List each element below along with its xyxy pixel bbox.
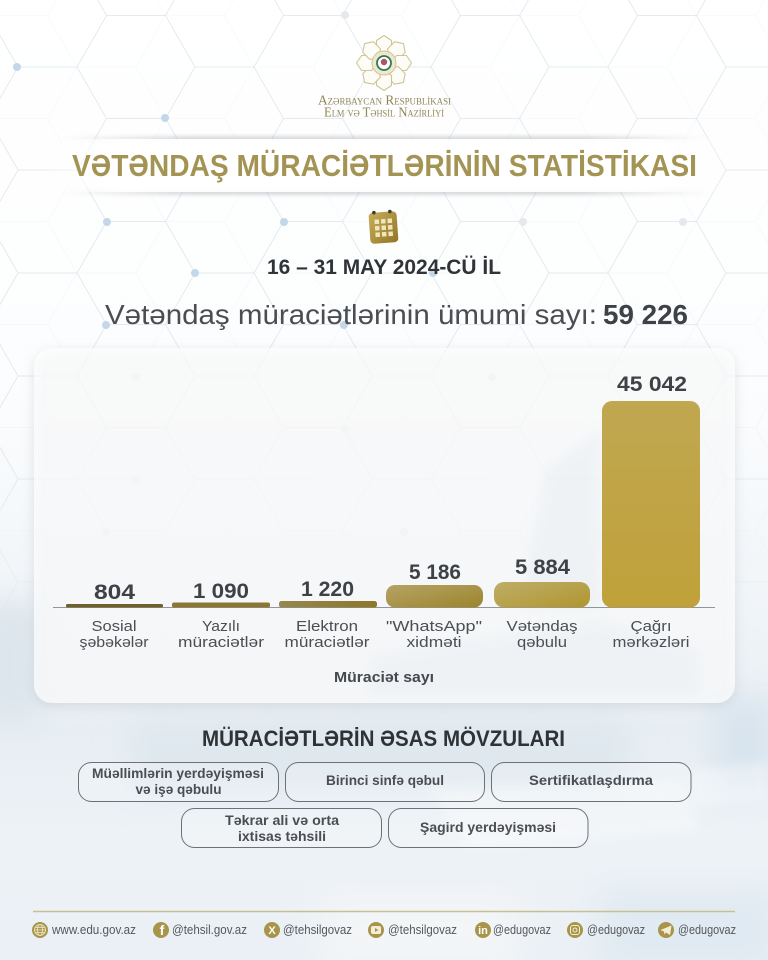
icon: X: @tehsilgovaz	[283, 923, 352, 937]
axis caption: Müraciət sayı	[334, 669, 434, 686]
pill: repeat higher education: ixtisas təhsili	[238, 828, 326, 844]
bar: WhatsApp xidməti: xidməti	[406, 634, 462, 651]
icon: linkedin	[475, 922, 551, 938]
title: VƏTƏNDAŞ MÜRACİƏTLƏRİNİN STATİSTİKASI	[72, 148, 697, 183]
icon: calendar	[368, 209, 399, 244]
bar: WhatsApp xidməti	[386, 561, 483, 651]
title band	[40, 137, 730, 194]
total appeals: 59 226	[603, 299, 688, 330]
axis	[53, 606, 715, 608]
logo: ministry emblem and name: Elm və Təhsil Nazirliyi	[324, 104, 444, 120]
bar: Yazılı müraciətlər: 1 090	[193, 580, 249, 603]
bar: Yazılı müraciətlər	[172, 580, 270, 651]
bar: WhatsApp xidməti: "WhatsApp"	[386, 618, 482, 635]
total appeals: Vətəndaş müraciətlərinin ümumi sayı:	[105, 299, 597, 330]
pill: first grade admission	[286, 762, 484, 802]
bar: Vətəndaş qəbulu: Vətəndaş	[506, 618, 578, 635]
pill: teacher transfer	[78, 762, 278, 802]
topic pills	[78, 762, 691, 848]
icon: instagram	[567, 922, 645, 938]
icon: X: X	[268, 925, 276, 937]
bar: Çağrı mərkəzləri	[602, 373, 700, 651]
bar: Sosial şəbəkələr: 804	[94, 581, 135, 604]
panel: bar chart	[34, 348, 735, 703]
bar: WhatsApp xidməti: 5 186	[409, 561, 461, 584]
bar: Vətəndaş qəbulu	[494, 556, 590, 651]
pill: student transfer	[388, 808, 588, 848]
icon: eight-petal emblem	[356, 36, 412, 90]
bar: Elektron müraciətlər: Elektron	[296, 618, 358, 635]
icon: website	[32, 922, 136, 938]
pill: repeat higher education: Təkrar ali və orta	[225, 812, 339, 828]
bar: Çağrı mərkəzləri: mərkəzləri	[612, 634, 690, 651]
bar: Elektron müraciətlər: 1 220	[301, 578, 354, 601]
bar: Sosial şəbəkələr: şəbəkələr	[80, 634, 148, 651]
icon: facebook	[153, 922, 247, 938]
icon: instagram: @edugovaz	[587, 923, 645, 937]
icon: X	[264, 922, 352, 938]
icon: facebook: @tehsil.gov.az	[172, 923, 247, 937]
bar: Elektron müraciətlər	[279, 578, 377, 651]
decorative building reflection	[370, 430, 700, 695]
bar: Yazılı müraciətlər: müraciətlər	[178, 634, 264, 651]
pill: repeat higher education	[182, 808, 382, 848]
icon: linkedin: in	[478, 925, 488, 937]
bar: Vətəndaş qəbulu: qəbulu	[517, 634, 567, 651]
bar: Çağrı mərkəzləri: Çağrı	[630, 618, 672, 635]
pill: certification	[492, 762, 691, 802]
icon: facebook: f	[160, 922, 165, 938]
bar: Yazılı müraciətlər: Yazılı	[202, 618, 240, 635]
icon: telegram	[658, 922, 736, 938]
footer: contact links	[32, 912, 736, 938]
section heading: main topics: MÜRACİƏTLƏRİN ƏSAS MÖVZULARI	[202, 726, 565, 751]
pill: student transfer: Şagird yerdəyişməsi	[420, 819, 556, 835]
bar: Sosial şəbəkələr	[66, 581, 163, 651]
date: 16 – 31 MAY 2024-CÜ İL	[267, 256, 501, 279]
icon: youtube: @tehsilgovaz	[388, 923, 457, 937]
logo: ministry emblem and name: Azərbaycan Respublikası	[318, 92, 451, 108]
pill: teacher transfer: və işə qəbulu	[136, 781, 222, 797]
logo: ministry emblem and name	[318, 36, 451, 120]
bar: Elektron müraciətlər: müraciətlər	[284, 634, 370, 651]
pill: certification: Sertifikatlaşdırma	[529, 772, 653, 788]
icon: website: www.edu.gov.az	[51, 923, 136, 937]
icon: telegram: @edugovaz	[678, 923, 736, 937]
icon: youtube	[368, 922, 457, 938]
pill: teacher transfer: Müəllimlərin yerdəyişməsi	[92, 765, 264, 781]
pill: first grade admission: Birinci sinfə qəbul	[326, 772, 444, 788]
icon: linkedin: @edugovaz	[493, 923, 551, 937]
bar: Sosial şəbəkələr: Sosial	[92, 618, 136, 635]
bar: Çağrı mərkəzləri: 45 042	[617, 373, 687, 396]
bar: Vətəndaş qəbulu: 5 884	[515, 556, 570, 579]
